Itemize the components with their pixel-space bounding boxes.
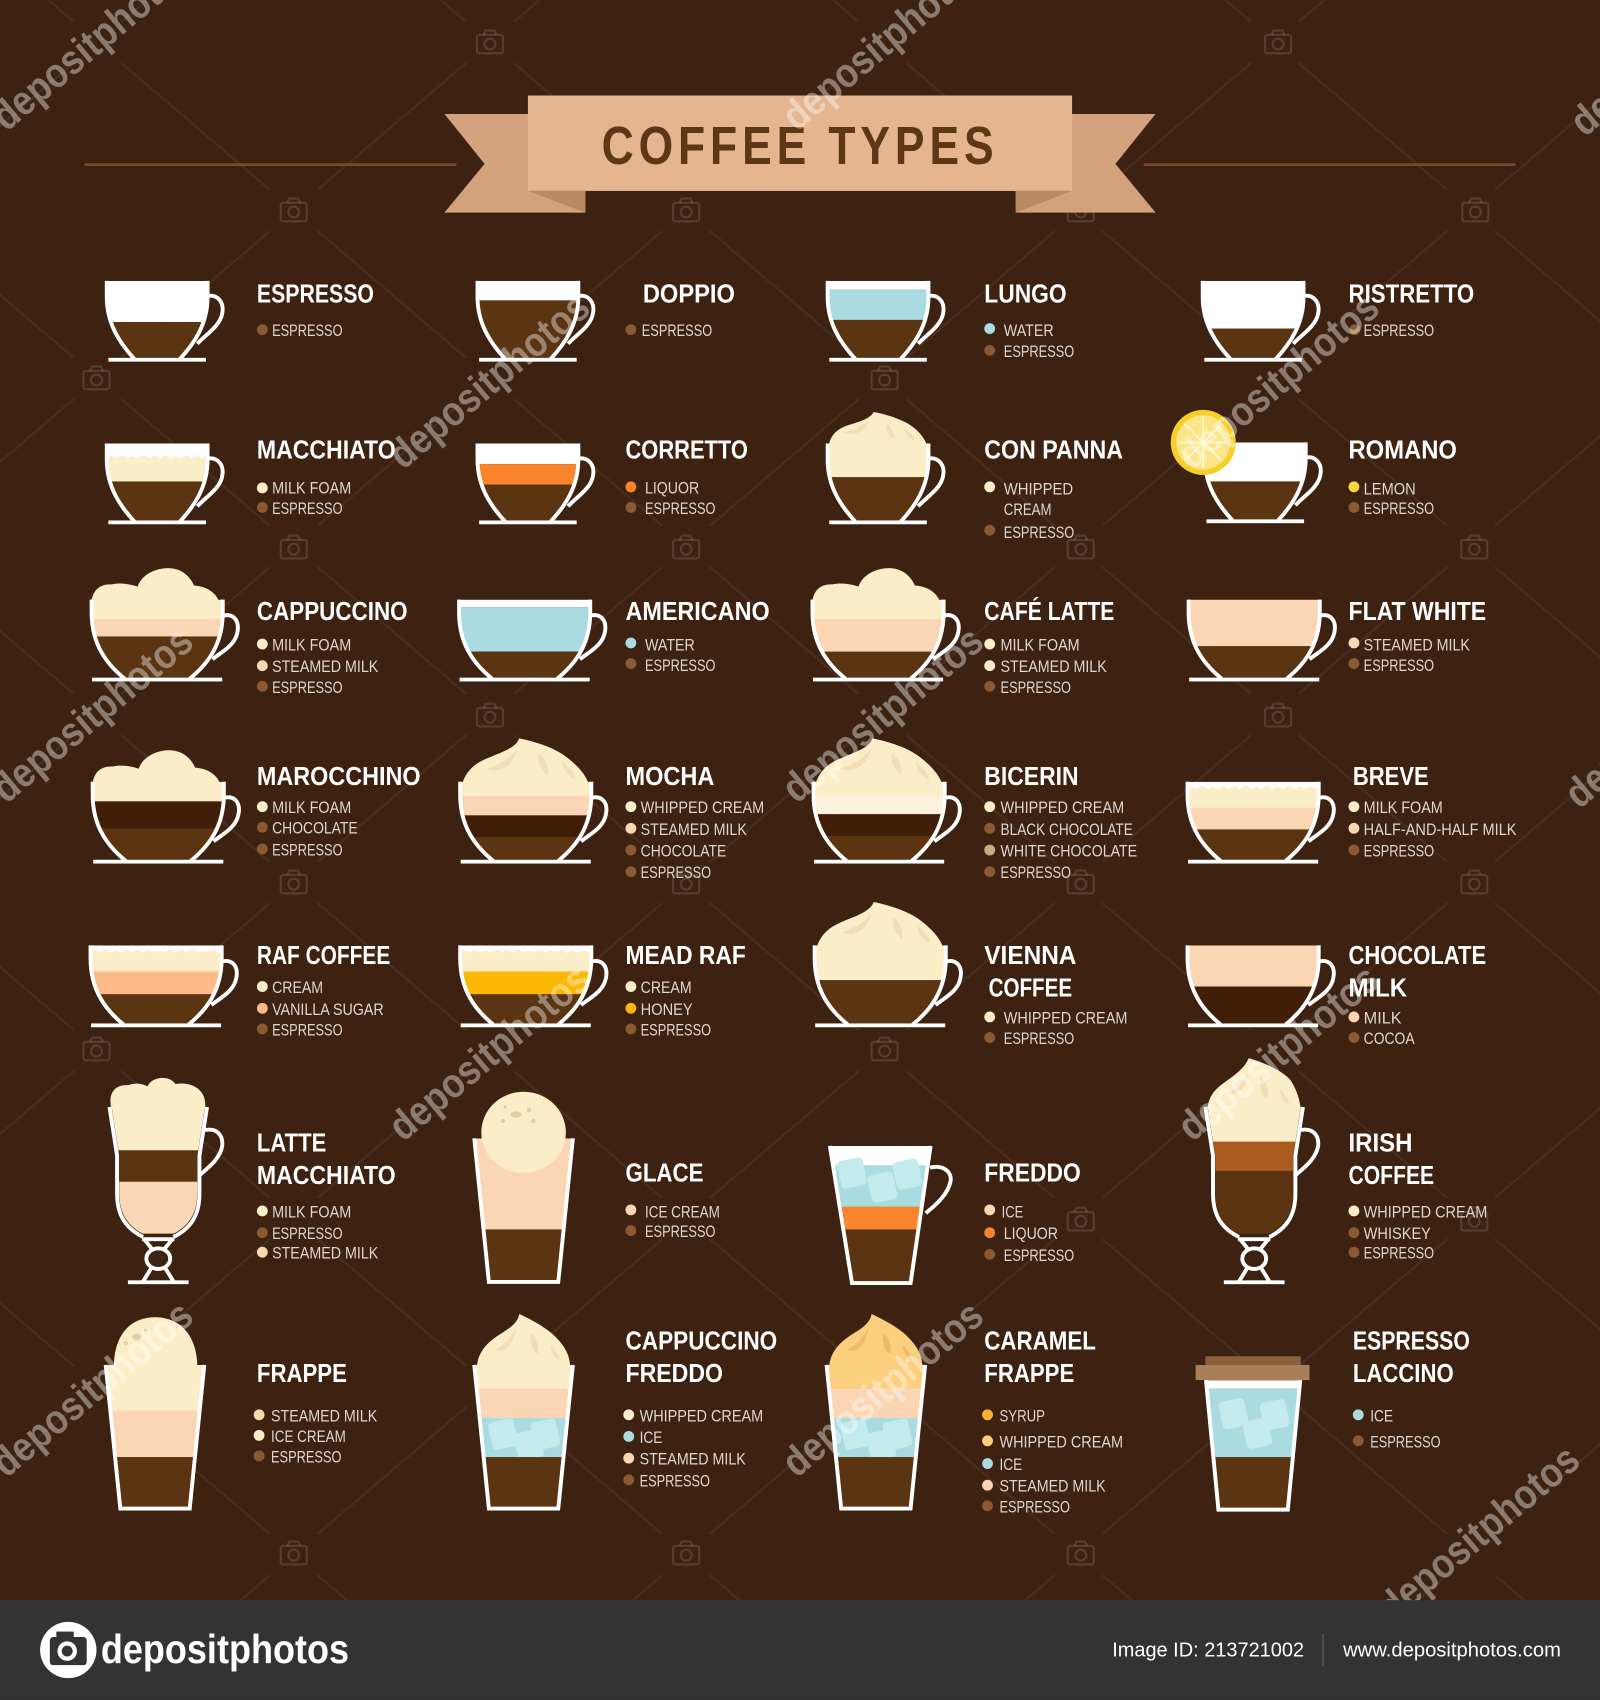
ingredients: ESPRESSO <box>1370 1432 1441 1451</box>
name <box>984 1328 1096 1388</box>
name: CAPPUCCINO <box>625 1328 777 1356</box>
ingredients: STEAMED MILK <box>272 1244 379 1263</box>
watermarks: depositphotos <box>773 1292 992 1486</box>
ingredients <box>1349 1008 1415 1048</box>
cup <box>811 568 959 682</box>
ingredients <box>1349 1202 1487 1263</box>
cup <box>89 945 237 1028</box>
panel: romano <box>1171 410 1457 525</box>
ingredients <box>625 636 715 675</box>
ingredients <box>625 798 764 882</box>
cup <box>476 443 593 528</box>
ingredients: ESPRESSO <box>272 1224 343 1243</box>
ingredients <box>254 1406 378 1466</box>
ingredients: CREAM <box>1004 500 1051 519</box>
line: title right <box>1144 163 1515 166</box>
ingredients: STEAMED MILK <box>1364 636 1471 655</box>
cup <box>813 902 961 1028</box>
ingredients <box>1349 479 1434 518</box>
ingredients: CHOCOLATE <box>641 842 726 861</box>
ingredients <box>257 321 343 340</box>
ingredients: VANILLA SUGAR <box>272 1000 384 1019</box>
name: FRAPPE <box>984 1360 1074 1388</box>
cup <box>459 945 606 1028</box>
logo text: depositphotos <box>101 1626 349 1672</box>
name: FREDDO <box>984 1160 1081 1188</box>
ingredients: WHIPPED CREAM <box>999 1432 1123 1451</box>
image id: Image ID: 213721002 <box>1112 1639 1304 1662</box>
panel: espresso laccino <box>1196 1328 1470 1511</box>
cup <box>826 281 944 363</box>
name: MAROCCHINO <box>257 763 421 791</box>
name <box>1349 1129 1434 1190</box>
ingredients: CREAM <box>272 978 323 997</box>
name: RISTRETTO <box>1349 281 1474 309</box>
ingredients: ESPRESSO <box>1364 656 1434 675</box>
panel: frappe <box>104 1317 378 1511</box>
panel: mead raf <box>459 942 746 1039</box>
ingredients: WHIPPED CREAM <box>640 1406 763 1425</box>
name <box>1349 942 1486 1002</box>
icon: lemon slice <box>1171 410 1236 475</box>
ingredients <box>625 978 711 1039</box>
cup <box>812 738 960 864</box>
panel: freddo <box>828 1146 1081 1284</box>
ingredients: ESPRESSO <box>1004 1246 1074 1265</box>
cup <box>1186 945 1334 1028</box>
name: FLAT WHITE <box>1349 598 1486 626</box>
ingredients: CHOCOLATE <box>272 819 358 838</box>
ingredients: LIQUOR <box>645 478 699 497</box>
ingredients: MILK FOAM <box>272 1202 351 1221</box>
ingredients: WHIPPED CREAM <box>641 798 764 817</box>
panel: macchiato <box>105 437 396 530</box>
panel: con panna <box>826 412 1123 542</box>
ingredients: MILK FOAM <box>272 478 351 497</box>
ingredients: WHIPPED CREAM <box>1004 1008 1127 1027</box>
ingredients: ICE CREAM <box>271 1427 346 1446</box>
ingredients: ESPRESSO <box>1364 1244 1434 1263</box>
ingredients <box>984 321 1074 361</box>
panel: corretto <box>476 437 748 528</box>
panel: bicerin <box>812 738 1137 882</box>
cup <box>1186 782 1334 864</box>
ingredients: ICE <box>999 1455 1022 1474</box>
footer bar <box>0 1600 1600 1700</box>
takeaway cup <box>1196 1356 1309 1511</box>
name: ESPRESSO <box>1353 1328 1470 1356</box>
glass <box>104 1317 206 1511</box>
panel: doppio <box>476 281 735 365</box>
panel: glace <box>473 1092 720 1284</box>
glass <box>828 1146 951 1284</box>
ingredients: STEAMED MILK <box>1001 657 1107 676</box>
ingredients <box>625 478 715 518</box>
name: CAPPUCCINO <box>257 598 408 626</box>
name: GLACE <box>625 1160 704 1188</box>
glass <box>473 1314 575 1511</box>
ingredients: STEAMED MILK <box>640 1450 746 1469</box>
ingredients: ICE <box>1370 1406 1393 1425</box>
ingredients <box>1349 798 1517 861</box>
ingredients: STEAMED MILK <box>271 1406 378 1425</box>
name: LUNGO <box>984 281 1067 309</box>
glass <box>108 1078 222 1284</box>
panel: cappuccino <box>90 568 408 697</box>
ingredients: LIQUOR <box>1004 1224 1058 1243</box>
ingredients <box>623 1406 763 1490</box>
glass <box>1204 1058 1318 1284</box>
name: FRAPPE <box>257 1360 347 1388</box>
ingredients: ESPRESSO <box>1004 1029 1074 1048</box>
panel: breve <box>1186 763 1517 864</box>
panel: espresso <box>105 281 374 365</box>
ingredients: WHISKEY <box>1364 1224 1431 1243</box>
name: BICERIN <box>984 763 1079 791</box>
ingredients: MILK FOAM <box>1364 798 1443 817</box>
panel: chocolate milk <box>1186 942 1486 1048</box>
glass <box>473 1092 575 1284</box>
ingredients: WATER <box>645 636 695 655</box>
ingredients: ESPRESSO <box>641 1020 711 1039</box>
ingredients: HALF-AND-HALF MILK <box>1364 820 1517 839</box>
name: MILK <box>1349 974 1408 1002</box>
cup <box>105 281 223 365</box>
name: FREDDO <box>625 1360 723 1388</box>
name <box>1353 1328 1470 1388</box>
watermark cameras <box>83 30 1488 1564</box>
ingredients: ESPRESSO <box>645 1222 715 1241</box>
ingredients: ICE CREAM <box>645 1202 720 1221</box>
name: DOPPIO <box>643 281 735 309</box>
cup <box>826 412 944 526</box>
cup <box>476 281 593 365</box>
name <box>984 942 1076 1002</box>
ingredients: LEMON <box>1364 479 1416 498</box>
ingredients <box>984 798 1137 882</box>
ingredients: STEAMED MILK <box>999 1477 1106 1496</box>
ingredients: ESPRESSO <box>272 499 343 518</box>
watermarks: depositphotos <box>379 955 598 1150</box>
name: IRISH <box>1349 1129 1412 1157</box>
ingredients: CREAM <box>641 978 692 997</box>
name: CARAMEL <box>984 1328 1096 1356</box>
ingredients: MILK FOAM <box>1001 636 1080 655</box>
panel: marocchino <box>91 750 421 864</box>
ingredients <box>257 478 351 518</box>
ingredients: ESPRESSO <box>272 321 343 340</box>
icon: logo camera <box>40 1622 96 1678</box>
ingredients: MILK FOAM <box>272 636 351 655</box>
panel: irish coffee <box>1204 1058 1487 1284</box>
ingredients: ESPRESSO <box>272 840 343 859</box>
ingredients: WHIPPED CREAM <box>1001 798 1124 817</box>
panel: caramel frappe <box>825 1314 1123 1516</box>
panel: americano <box>457 598 770 682</box>
name: COFFEE <box>989 974 1072 1002</box>
ingredients <box>625 321 712 340</box>
name: CAFÉ LATTE <box>984 597 1114 626</box>
ingredients: ESPRESSO <box>1364 499 1434 518</box>
name: LATTE <box>257 1129 326 1157</box>
watermarks: depositphotos <box>1169 955 1388 1150</box>
cup <box>90 568 238 682</box>
name: MACCHIATO <box>257 1162 396 1190</box>
glass <box>825 1314 927 1511</box>
name: ESPRESSO <box>257 281 374 309</box>
panel: raf coffee <box>89 942 390 1039</box>
name: CHOCOLATE <box>1349 942 1486 970</box>
ingredients <box>1350 321 1434 340</box>
ingredients: ESPRESSO <box>1001 863 1071 882</box>
ingredients: ICE <box>1002 1202 1023 1221</box>
ingredients: COCOA <box>1364 1029 1415 1048</box>
ingredients: STEAMED MILK <box>272 657 379 676</box>
ingredients <box>257 978 384 1039</box>
cup <box>1187 600 1335 682</box>
name: CORRETTO <box>625 437 748 465</box>
ingredients: ESPRESSO <box>1001 678 1071 697</box>
ingredients: ESPRESSO <box>999 1497 1070 1516</box>
ingredients: ESPRESSO <box>645 499 715 518</box>
cup <box>459 738 606 864</box>
panel: flat white <box>1187 598 1486 682</box>
cup <box>91 750 239 864</box>
ingredients <box>625 1202 720 1241</box>
name: MEAD RAF <box>625 942 746 970</box>
ingredients <box>257 636 379 697</box>
ingredients <box>1353 1406 1441 1451</box>
ingredients: WATER <box>1004 321 1054 340</box>
cup <box>1203 442 1321 525</box>
watermarks: depositphotos <box>773 617 992 811</box>
ingredients: ESPRESSO <box>1364 321 1434 340</box>
ingredients: ESPRESSO <box>1004 342 1074 361</box>
cup <box>104 444 225 524</box>
ingredients <box>1349 636 1471 675</box>
ingredients <box>257 798 358 859</box>
ingredients: ESPRESSO <box>1004 523 1074 542</box>
line: title left <box>85 163 456 166</box>
name: BREVE <box>1353 763 1429 791</box>
ingredients: ESPRESSO <box>641 863 711 882</box>
panel: vienna coffee <box>813 902 1127 1048</box>
ingredients <box>257 1202 379 1263</box>
ingredients: HONEY <box>641 1000 693 1019</box>
ingredients: STEAMED MILK <box>641 820 748 839</box>
ingredients: ESPRESSO <box>645 656 715 675</box>
ingredients: ESPRESSO <box>1364 842 1434 861</box>
watermarks: depositphotos <box>379 283 598 477</box>
ingredients: ESPRESSO <box>271 1447 341 1466</box>
name: CON PANNA <box>984 437 1123 465</box>
name <box>257 1129 396 1190</box>
name: COFFEE <box>1349 1162 1434 1190</box>
ingredients <box>984 1202 1074 1265</box>
ingredients <box>984 1008 1127 1048</box>
ingredients: WHITE CHOCOLATE <box>1001 842 1137 861</box>
ingredients: WHIPPED CREAM <box>1364 1202 1487 1221</box>
name: AMERICANO <box>625 598 770 626</box>
panel: cafe latte <box>811 568 1114 697</box>
ingredients: MILK <box>1364 1008 1402 1027</box>
name: MACCHIATO <box>257 437 396 465</box>
ingredients <box>984 636 1107 697</box>
cup <box>1201 281 1319 365</box>
ingredients: ESPRESSO <box>272 1020 343 1039</box>
name: LACCINO <box>1353 1360 1454 1388</box>
ingredients: BLACK CHOCOLATE <box>1001 820 1133 839</box>
cup <box>457 600 605 682</box>
name: ROMANO <box>1349 437 1457 465</box>
ingredients: MILK FOAM <box>272 798 351 817</box>
ingredients: WHIPPED <box>1004 479 1073 498</box>
panel: ristretto <box>1201 281 1474 365</box>
ingredients: ESPRESSO <box>642 321 712 340</box>
ingredients: ICE <box>640 1428 662 1447</box>
ingredients <box>982 1406 1123 1516</box>
ingredients: SYRUP <box>999 1406 1045 1425</box>
panel: mocha <box>459 738 764 882</box>
panel: latte macchiato <box>108 1078 396 1284</box>
panel: lungo <box>826 281 1074 363</box>
panel: cappuccino freddo <box>473 1314 777 1511</box>
ingredients: ESPRESSO <box>640 1471 710 1490</box>
title: COFFEE TYPES <box>602 115 994 176</box>
name: MOCHA <box>625 763 714 791</box>
ingredients <box>984 479 1074 542</box>
name: VIENNA <box>984 942 1076 970</box>
ingredients: ESPRESSO <box>272 678 343 697</box>
watermarks: depositphotos <box>1169 283 1388 477</box>
website: www.depositphotos.com <box>1342 1639 1561 1662</box>
name: RAF COFFEE <box>257 942 390 970</box>
title banner <box>444 96 1156 213</box>
name <box>625 1328 777 1388</box>
